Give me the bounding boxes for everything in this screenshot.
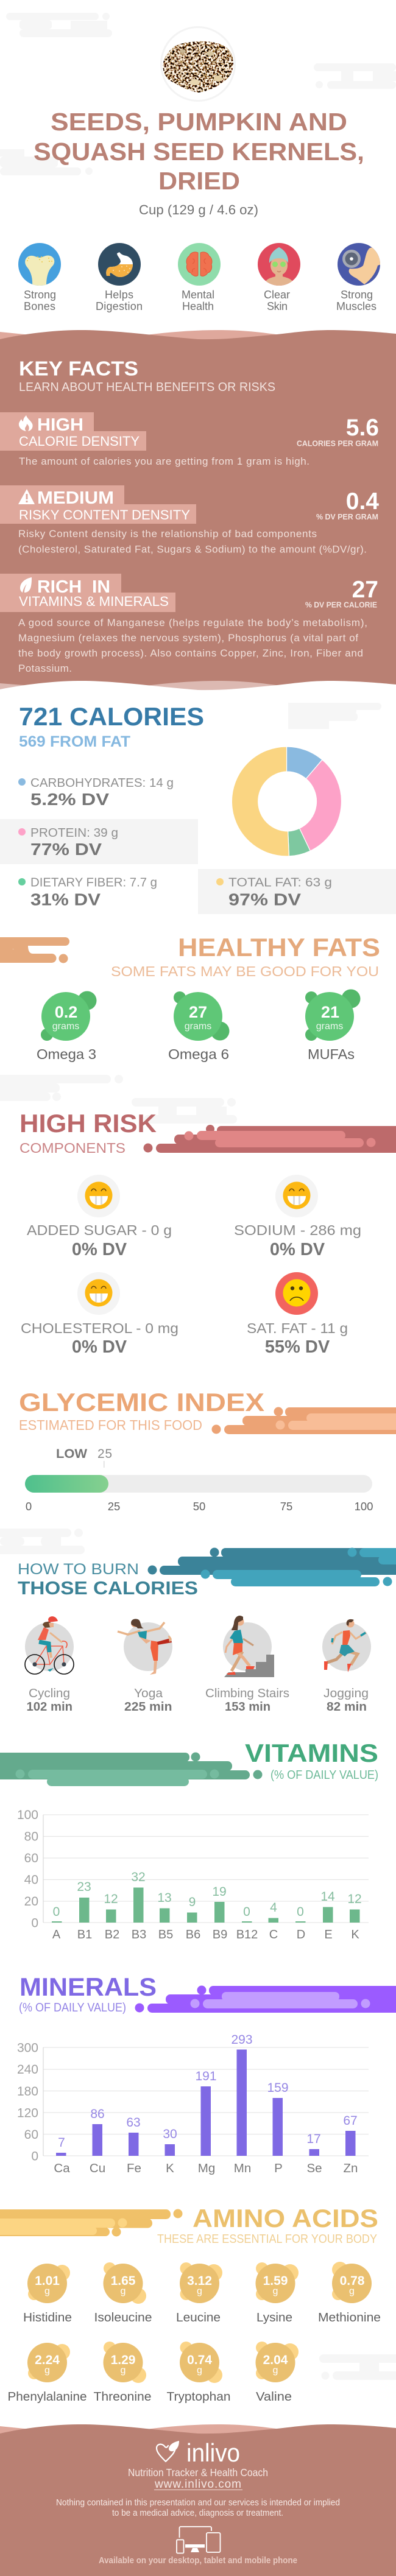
x axis: B9 [213,1928,227,1941]
x axis: Ca [54,2161,70,2175]
value labels: 23 [77,1880,91,1894]
value labels: 13 [157,1891,172,1905]
y axis: 60 [24,1851,38,1865]
value 0.4: 0.4 [346,488,379,515]
label: mufas: MUFAs [308,1046,355,1062]
badge: omega 6: 27 [189,1003,207,1021]
amino: phenylalanine: g [44,2365,50,2376]
label: strong bones: Strong [24,289,56,301]
value labels: 63 [126,2116,141,2130]
panel: vitamins [0,1739,378,1941]
item: cholesterol: CHOLESTEROL - 0 mg [21,1320,179,1336]
amino: isoleucine [94,2262,152,2324]
macro: carbohydrates: CARBOHYDRATES: 14 g [30,776,174,790]
x axis: Mn [234,2161,251,2175]
item: cholesterol: 0% DV [72,1337,127,1357]
heading: amino acids: AMINO ACIDS [193,2204,378,2233]
panel: minerals [17,1972,396,2175]
item: saturated fat: SAT. FAT - 11 g [247,1320,348,1336]
macro: dietary fiber: DIETARY FIBER: 7.7 g [30,876,157,889]
x axis: K [351,1928,359,1941]
macro: protein [18,826,118,859]
value labels: 32 [131,1870,146,1884]
fact: medium risky content density [0,485,379,555]
heading: how to burn: HOW TO BURN [18,1561,139,1578]
marker value: 25 [97,1447,112,1461]
icon: flame [19,415,33,431]
value labels [58,2033,358,2150]
label: helps digestion: Helps [105,289,133,301]
amino: lysine: 1.59 [263,2274,288,2288]
panel: amino acids [0,2204,396,2404]
background pattern [0,1529,85,1554]
gauge track [25,1475,372,1493]
amino: leucine: Leucine [176,2310,221,2324]
subheading: ESTIMATED FOR THIS FOOD [19,1417,202,1433]
y axis [17,2041,38,2163]
badge: omega 6 [174,991,229,1041]
amino: methionine: 0.78 [340,2274,365,2288]
y axis: 80 [24,1829,38,1844]
x axis [54,2161,358,2175]
label: mental health: Health [182,300,214,312]
amino: lysine: g [273,2286,278,2296]
disclaimer: to be a medical advice, diagnosis or treatment. [112,2508,283,2518]
amino: threonine: Threonine [94,2390,151,2404]
amino: valine: 2.04 [263,2353,288,2367]
value labels: 7 [58,2136,65,2150]
x axis: B1 [77,1928,92,1941]
subheading: SOME FATS MAY BE GOOD FOR YOU [111,963,379,979]
gauge axis: 25 [108,1500,120,1513]
gauge axis: 0 [26,1500,32,1513]
x axis: Zn [344,2161,358,2175]
panel: calories [0,702,396,914]
title: DRIED [158,167,240,195]
amino: histidine [23,2264,72,2324]
label bands [0,485,196,524]
amino: tryptophan: 0.74 [187,2353,212,2367]
subheading: risky content density: RISKY CONTENT DENSITY [19,507,190,523]
icon: devices [177,2527,221,2553]
heading: rich in: RICH IN [37,577,110,597]
banner graphic [147,1548,396,1586]
amino: isoleucine: g [121,2286,126,2296]
bar chart: minerals [17,2033,369,2175]
title [34,108,364,195]
amino: methionine: Methionine [318,2310,381,2324]
amino: tryptophan [167,2342,230,2404]
label: clear skin: Skin [267,300,288,312]
value: cycling: 102 min [27,1700,72,1714]
activity: jogging [322,1619,371,1672]
item: cholesterol [21,1272,179,1357]
panel: footer [0,2424,396,2576]
x axis: K [166,2161,174,2175]
marker tick [104,1461,105,1468]
label: helps digestion: Digestion [96,300,143,312]
banner graphic [0,2209,183,2236]
y axis: 40 [24,1873,38,1887]
value labels: 0 [297,1905,304,1919]
food image [161,27,235,101]
title: SQUASH SEED KERNELS, [34,138,364,166]
x axis: Mg [198,2161,215,2175]
x axis: Cu [90,2161,105,2175]
value labels [53,1870,362,1919]
activity: cycling [25,1616,74,1674]
activity: climbing stairs [223,1616,274,1677]
value labels: 14 [320,1890,335,1904]
badge: mufas: 21 [321,1003,339,1021]
value labels: 191 [195,2069,217,2083]
y axis: 0 [31,2150,38,2163]
amino: threonine [94,2342,151,2404]
background pattern [288,703,381,729]
y axis: 240 [17,2063,38,2077]
amino: methionine [318,2262,381,2324]
value labels: 9 [189,1895,196,1909]
background pattern: high risk [0,1075,237,1124]
amino: lysine [256,2262,299,2324]
y axis: 20 [24,1895,38,1909]
macro: total fat [216,876,332,909]
value labels: 4 [270,1901,277,1915]
macro: total fat: TOTAL FAT: 63 g [228,876,332,889]
y axis: 0 [31,1916,38,1930]
heading: high risk: HIGH RISK [19,1109,157,1138]
value labels: 0 [53,1905,60,1919]
icon: strong muscles [338,243,381,286]
logo wordmark: inlivo [186,2438,240,2467]
item: sodium: SODIUM - 286 mg [234,1222,361,1238]
subheading: calorie density: CALORIE DENSITY [19,434,140,449]
amino: threonine: 1.29 [111,2353,135,2367]
banner graphic [144,1125,396,1153]
description: The amount of calories you are getting from 1 gram is high. [19,456,309,467]
x axis: B2 [105,1928,119,1941]
amino: histidine: Histidine [23,2310,72,2324]
amino: histidine: 1.01 [35,2274,60,2288]
y axis: 300 [17,2041,38,2055]
value labels: 12 [347,1892,362,1906]
label: climbing stairs: Climbing Stairs [205,1686,289,1700]
amino: leucine: 3.12 [187,2274,212,2288]
value: jogging: 82 min [327,1700,367,1714]
macro: dietary fiber: 31% DV [30,890,101,909]
activity: yoga [118,1619,172,1675]
panel: healthy fats [0,933,380,1062]
label bands [0,574,175,612]
value labels: 0 [243,1905,250,1919]
amino: lysine: Lysine [256,2310,292,2324]
macro: dietary fiber [18,876,157,909]
badge: omega 3 [41,991,96,1041]
y axis: 100 [17,1808,38,1822]
amino: phenylalanine [7,2343,87,2404]
value labels: 17 [306,2132,321,2146]
marker label: low: LOW [56,1447,87,1461]
fact: rich in vitamins and minerals [0,574,378,674]
amino: histidine: g [44,2286,50,2296]
amino: leucine [176,2262,222,2324]
value labels: 19 [212,1885,227,1899]
value labels: 159 [267,2081,289,2095]
description: Risky Content density is the relationship of bad components [18,528,317,540]
panel background [0,344,396,691]
bar chart: vitamins [17,1808,369,1941]
item: added sugar [27,1175,172,1259]
value labels: 30 [163,2127,177,2141]
panel: key facts [0,330,396,699]
bars [52,1888,359,1923]
item: sodium: 0% DV [270,1240,325,1259]
value: climbing stairs: 153 min [225,1700,270,1714]
label: strong bones: Bones [24,300,55,312]
heading: key facts: KEY FACTS [19,357,138,380]
website link: www.inlivo.com [154,2478,241,2491]
x axis: A [52,1928,61,1941]
amino: tryptophan: g [197,2365,202,2376]
icon: leaf [20,577,32,593]
badge: omega 6: grams [185,1021,211,1032]
badge: omega 3: grams [52,1021,79,1032]
tagline: Nutrition Tracker & Health Coach [128,2466,268,2479]
heading: high: HIGH [37,415,83,435]
icon: strong bones [18,243,61,286]
description: the body growth process). Also contains Copper, Zinc, Iron, Fiber and [18,647,363,659]
title: SEEDS, PUMPKIN AND [51,108,347,136]
banner graphic [0,1753,262,1786]
x axis [52,1928,359,1941]
macro: carbohydrates [18,776,174,809]
unit: CALORIES PER GRAM [297,438,378,448]
label: strong muscles: Strong [341,289,373,301]
amino: valine [256,2342,299,2404]
macro: carbohydrates: 5.2% DV [30,790,109,809]
banner graphic [212,1407,396,1434]
x axis: Fe [127,2161,141,2175]
label: mental health: Mental [182,289,214,301]
row highlight: protein [0,819,198,864]
badge: omega 3: 0.2 [55,1003,77,1021]
label: omega 3: Omega 3 [37,1046,96,1062]
benefit icons row [18,243,381,312]
row highlight: total fat [198,869,396,914]
description: Magnesium (relaxes the nervous system), Phosphorus (a vital part of [18,632,358,644]
label bands [0,412,146,451]
amino: valine: g [273,2365,278,2376]
amino: leucine: g [197,2286,202,2296]
x axis: B5 [158,1928,173,1941]
macro: protein: PROTEIN: 39 g [30,826,118,840]
donut chart [232,747,342,856]
footer wave [0,2424,396,2576]
x axis: B12 [236,1928,258,1941]
serving size: Cup (129 g / 4.6 oz) [139,202,258,217]
subheading: (% OF DAILY VALUE) [270,1768,378,1782]
heading: glycemic index: GLYCEMIC INDEX [19,1388,264,1416]
fact: high calorie density [0,412,379,467]
y axis: 180 [17,2085,38,2099]
availability note: Available on your desktop, tablet and mobile phone [99,2555,297,2566]
item: added sugar: ADDED SUGAR - 0 g [27,1222,172,1238]
panel: high risk [19,1109,396,1357]
description: Potassium. [18,663,72,674]
amino: isoleucine: Isoleucine [94,2310,152,2324]
logo mark [157,2441,179,2462]
heading: medium: MEDIUM [37,488,114,508]
disclaimer: Nothing contained in this presentation and our services is intended or implied [56,2497,340,2508]
x axis: E [324,1928,333,1941]
banner graphic [0,937,69,963]
heading: minerals: MINERALS [19,1972,157,2001]
value: yoga: 225 min [124,1700,172,1714]
panel: how to burn [0,1529,396,1714]
value 27: 27 [352,577,378,603]
top wave [0,330,396,348]
label: strong muscles: Muscles [336,300,377,312]
bars [56,2050,356,2156]
y axis: 60 [24,2128,38,2142]
amino: phenylalanine: Phenylalanine [7,2390,87,2404]
x axis: B3 [132,1928,146,1941]
gauge axis: 100 [355,1500,373,1513]
gauge fill [25,1475,108,1493]
icon: warning [18,489,35,504]
heading: 721 calories: 721 CALORIES [19,702,204,731]
grid [43,1815,369,1923]
unit: % DV PER GRAM [316,512,378,521]
grid [43,2047,369,2156]
subheading: components: COMPONENTS [19,1140,126,1156]
heading: healthy fats: HEALTHY FATS [178,933,380,962]
badge: mufas [305,989,361,1041]
y axis: 120 [17,2106,38,2120]
amino: tryptophan: Tryptophan [167,2390,230,2404]
item: saturated fat [247,1272,348,1357]
description: (Cholesterol, Saturated Fat, Sugars & Sodium) to the amount (%DV/gr). [18,543,367,555]
label: omega 6: Omega 6 [168,1046,229,1062]
amino: isoleucine: 1.65 [111,2274,136,2288]
amino: threonine: g [121,2365,126,2376]
icon: mental health [178,243,221,286]
banner graphic [135,1985,396,2013]
label: jogging: Jogging [324,1686,369,1700]
y axis [17,1808,38,1930]
value labels: 67 [343,2114,358,2128]
item: saturated fat: 55% DV [265,1337,330,1357]
icon: clear skin [258,243,300,286]
background pattern: right [319,2354,396,2380]
x axis: Se [306,2161,322,2175]
unit: % DV PER CALORIE [305,600,377,609]
macro: protein: 77% DV [30,840,102,859]
value labels: 293 [231,2033,253,2047]
gauge axis [26,1500,373,1513]
item: sodium [234,1175,361,1259]
panel: glycemic index [19,1388,396,1513]
label: clear skin: Clear [264,289,290,301]
macro: total fat: 97% DV [228,890,301,909]
amino: phenylalanine: 2.24 [35,2353,60,2367]
subheading: LEARN ABOUT HEALTH BENEFITS OR RISKS [19,381,275,394]
x axis: P [274,2161,283,2175]
x axis: B6 [186,1928,200,1941]
badge: mufas: grams [316,1021,343,1032]
amino: methionine: g [349,2286,355,2296]
subheading: (% OF DAILY VALUE) [19,2001,126,2015]
label: cycling: Cycling [29,1686,70,1700]
background pattern: header [0,13,396,175]
bottom wave [0,681,396,699]
gauge axis: 75 [280,1500,292,1513]
gauge axis: 50 [193,1500,205,1513]
x axis: D [297,1928,305,1941]
x axis: C [269,1928,278,1941]
subheading: from fat: 569 FROM FAT [19,733,130,750]
icon: helps digestion [98,243,141,286]
value labels: 12 [104,1892,118,1906]
heading: vitamins: VITAMINS [245,1739,378,1767]
subheading: vitamins and minerals: VITAMINS & MINERALS [19,594,169,609]
heading: those calories: THOSE CALORIES [18,1577,198,1599]
value 5.6: 5.6 [346,415,379,441]
item: added sugar: 0% DV [72,1240,127,1259]
amino: valine: Valine [256,2390,292,2404]
value labels: 86 [90,2107,105,2121]
label: yoga: Yoga [134,1686,163,1700]
description: A good source of Manganese (helps regulate the body’s metabolism), [18,617,367,628]
